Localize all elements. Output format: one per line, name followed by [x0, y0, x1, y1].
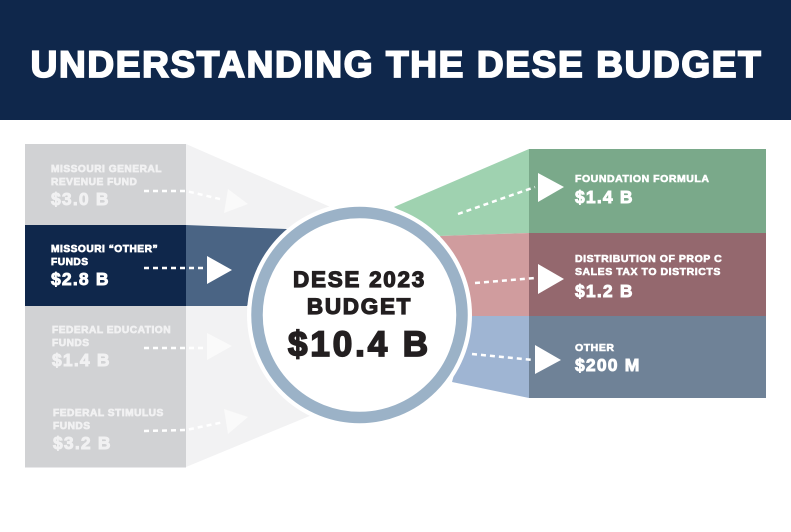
- category: Distribution of Prop C: $1.2 B: [575, 281, 634, 301]
- panel: spending categories: [394, 149, 766, 398]
- category: Other: [452, 316, 766, 398]
- source: Missouri other funds: [25, 225, 287, 306]
- source: Missouri other funds: FUNDS: [51, 257, 89, 268]
- category: Foundation Formula: $1.4 B: [575, 187, 634, 207]
- source: Federal education funds: $1.4 B: [52, 350, 111, 370]
- source: Missouri other funds: MISSOURI “OTHER”: [51, 244, 158, 255]
- category: Other: $200 M: [575, 355, 641, 375]
- category: Foundation Formula: [394, 149, 766, 236]
- category: Other: OTHER: [575, 342, 614, 354]
- source: Missouri other funds: $2.8 B: [51, 269, 110, 289]
- center budget circle: BUDGET: [307, 294, 412, 319]
- source: Missouri general revenue fund: $3.0 B: [51, 189, 110, 209]
- title banner: UNDERSTANDING THE DESE BUDGET: [31, 44, 762, 85]
- source: Federal education funds: FUNDS: [52, 338, 90, 349]
- category: Distribution of Prop C: SALES TAX TO DISTRICTS: [575, 266, 721, 278]
- source: Federal education funds: [25, 306, 262, 387]
- source: Federal stimulus funds: FUNDS: [53, 421, 91, 432]
- center budget circle: DESE 2023: [293, 267, 426, 292]
- source: Federal education funds: FEDERAL EDUCATION: [52, 325, 171, 336]
- panel: funding sources: [25, 144, 335, 468]
- source: Federal stimulus funds: FEDERAL STIMULUS: [53, 408, 164, 419]
- title banner: [0, 0, 791, 120]
- source: Missouri general revenue fund: MISSOURI GENERAL: [51, 164, 162, 175]
- category: Foundation Formula: FOUNDATION FORMULA: [575, 173, 710, 185]
- center budget circle: [247, 202, 472, 428]
- source: Federal stimulus funds: [25, 355, 312, 468]
- source: Missouri general revenue fund: REVENUE FUND: [51, 177, 137, 188]
- category: Distribution of Prop C: [440, 233, 766, 316]
- category: Distribution of Prop C: DISTRIBUTION OF PROP C: [575, 253, 722, 265]
- source: Missouri general revenue fund: [25, 144, 335, 229]
- source: Federal stimulus funds: $3.2 B: [53, 433, 112, 453]
- center budget circle: $10.4 B: [288, 325, 431, 364]
